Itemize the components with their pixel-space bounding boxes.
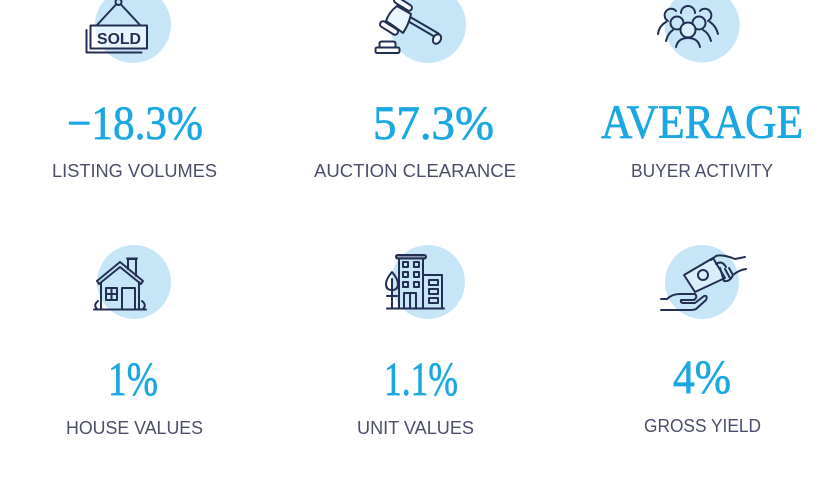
panel: house values xyxy=(66,245,203,438)
icon: apartment building and tree xyxy=(386,245,465,319)
icon: sold sign: SOLD xyxy=(97,31,141,48)
label: auction clearance: AUCTION CLEARANCE xyxy=(314,161,516,181)
value: auction clearance: 57.3% xyxy=(373,97,494,150)
icon: group of people xyxy=(658,0,740,62)
label: house values: HOUSE VALUES xyxy=(66,418,203,438)
label: buyer activity: BUYER ACTIVITY xyxy=(631,161,773,181)
value: house values: 1% xyxy=(108,353,158,406)
value: listing volumes: −18.3% xyxy=(67,97,203,150)
icon: hands exchanging money xyxy=(661,245,746,319)
icon: gavel xyxy=(376,0,466,63)
icon: sold sign xyxy=(86,0,171,63)
value: buyer activity: AVERAGE xyxy=(601,96,803,149)
panel: buyer activity xyxy=(601,0,803,181)
panel: unit values xyxy=(357,245,474,438)
value: gross yield: 4% xyxy=(673,351,731,404)
value: unit values: 1.1% xyxy=(384,353,458,406)
label: listing volumes: LISTING VOLUMES xyxy=(52,161,217,181)
label: unit values: UNIT VALUES xyxy=(357,418,474,438)
label: gross yield: GROSS YIELD xyxy=(644,416,761,436)
panel: auction clearance xyxy=(314,0,516,181)
icon: house xyxy=(94,245,171,319)
panel: listing volumes xyxy=(52,0,217,181)
panel: gross yield xyxy=(644,245,761,436)
